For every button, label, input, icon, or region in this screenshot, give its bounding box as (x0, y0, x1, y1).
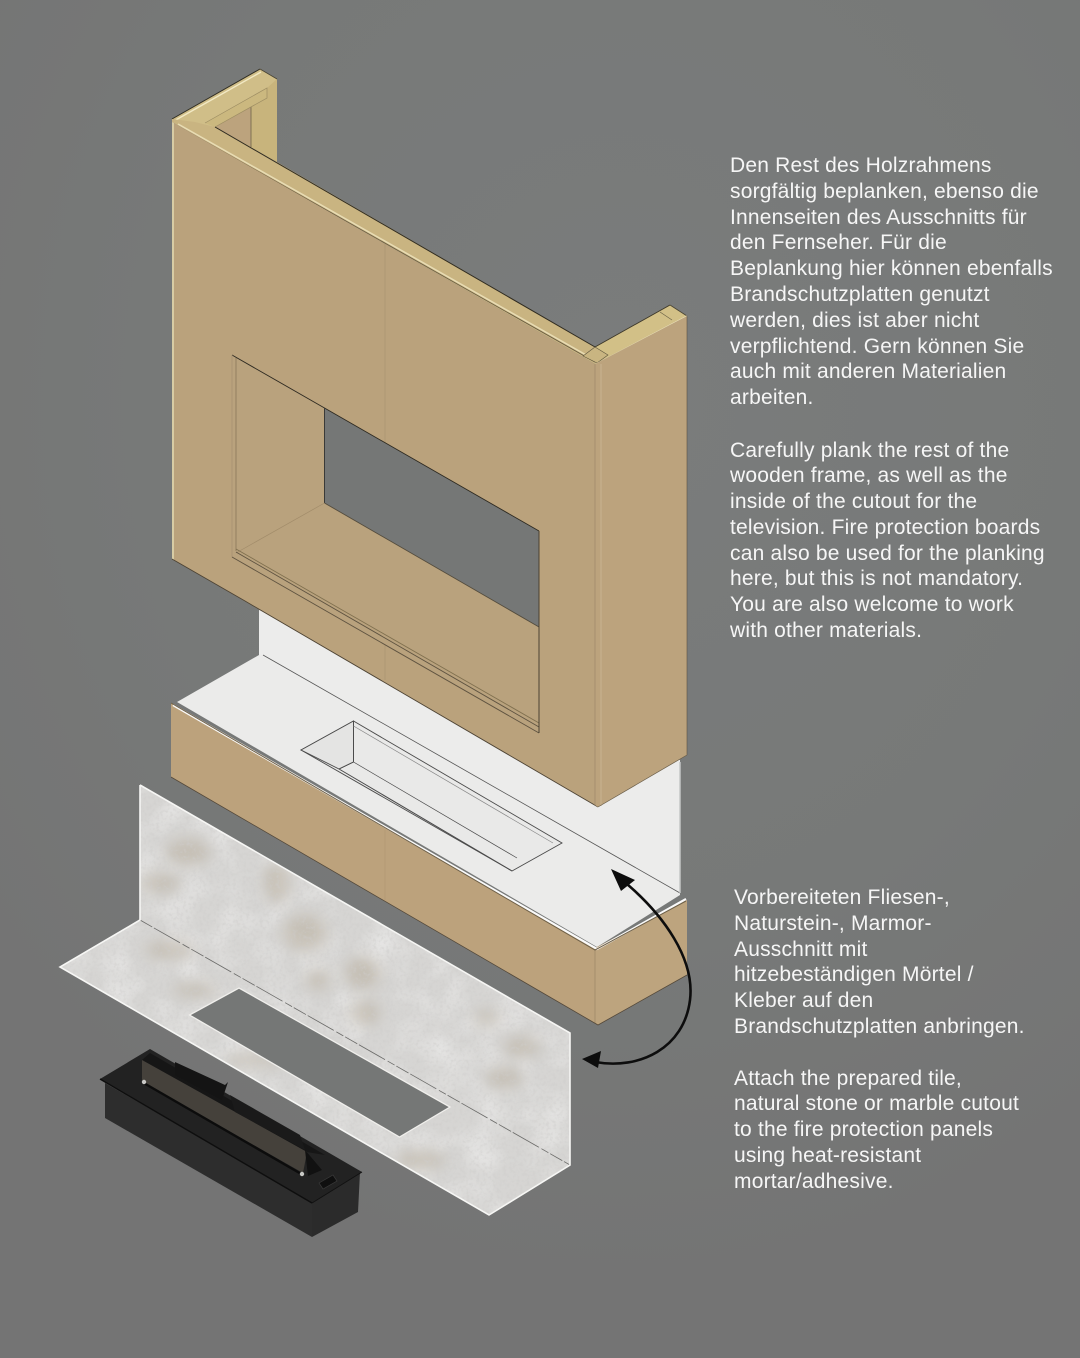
English text: planking instructions: can also be used for the planking (730, 542, 1045, 565)
English text: mounting the stone cutout: using heat-resistant (734, 1144, 921, 1167)
German text: mounting the stone cutout: Brandschutzplatten anbringen. (734, 1015, 1025, 1038)
German text: planking instructions (730, 154, 1053, 409)
English text: planking instructions: with other materials. (730, 619, 922, 642)
German text: planking instructions: den Fernseher. Für die (730, 231, 947, 254)
German text: mounting the stone cutout: Kleber auf den (734, 989, 873, 1012)
German text: planking instructions: sorgfältig beplanken, ebenso die (730, 180, 1039, 203)
white backing wall and hearth top (177, 610, 680, 947)
curved double-headed arrow (582, 869, 691, 1068)
German text: mounting the stone cutout (734, 886, 1025, 1038)
exploded isometric illustration (58, 68, 692, 1237)
burner slot in hearth (301, 721, 562, 871)
lower wooden base (171, 703, 687, 1025)
German text: planking instructions: auch mit anderen Materialien (730, 360, 1006, 383)
English text: planking instructions: inside of the cutout for the (730, 490, 977, 513)
rear frame studs at top left (172, 69, 277, 162)
English text: mounting the stone cutout (734, 1066, 1019, 1193)
right end frame top (583, 305, 687, 364)
English text: mounting the stone cutout: mortar/adhesive. (734, 1170, 894, 1193)
German text: mounting the stone cutout: Naturstein-, Marmor- (734, 912, 932, 935)
planked right wall (595, 316, 687, 807)
English text: planking instructions: television. Fire protection boards (730, 516, 1040, 539)
English text: planking instructions: here, but this is not mandatory. (730, 567, 1023, 590)
German text: mounting the stone cutout: Vorbereiteten Fliesen-, (734, 886, 950, 909)
German text: mounting the stone cutout: Ausschnitt mit (734, 938, 868, 961)
German text: planking instructions: verpflichtend. Gern können Sie (730, 335, 1024, 358)
German text: mounting the stone cutout: hitzebeständigen Mörtel / (734, 963, 974, 986)
planked front wall with television cutout (172, 122, 598, 807)
English text: planking instructions: Carefully plank the rest of the (730, 438, 1009, 462)
English text: mounting the stone cutout: to the fire protection panels (734, 1118, 993, 1141)
black ethanol burner insert (100, 1049, 362, 1237)
German text: planking instructions: Den Rest des Holzrahmens (730, 154, 992, 177)
English text: planking instructions: wooden frame, as well as the (730, 464, 1008, 487)
German text: planking instructions: arbeiten. (730, 386, 814, 409)
English text: planking instructions: You are also welcome to work (730, 593, 1014, 616)
German text: planking instructions: werden, dies ist aber nicht (730, 309, 979, 332)
English text: mounting the stone cutout: Attach the prepared tile, (734, 1066, 962, 1090)
English text: mounting the stone cutout: natural stone or marble cutout (734, 1092, 1019, 1115)
cutout recess (232, 355, 539, 733)
German text: planking instructions: Innenseiten des Ausschnitts für (730, 206, 1027, 229)
German text: planking instructions: Beplankung hier können ebenfalls (730, 257, 1053, 280)
English text: planking instructions (730, 438, 1045, 642)
marble slab with cutout (55, 780, 575, 1220)
German text: planking instructions: Brandschutzplatten genutzt (730, 283, 990, 306)
top edge of wooden frame (172, 119, 595, 364)
